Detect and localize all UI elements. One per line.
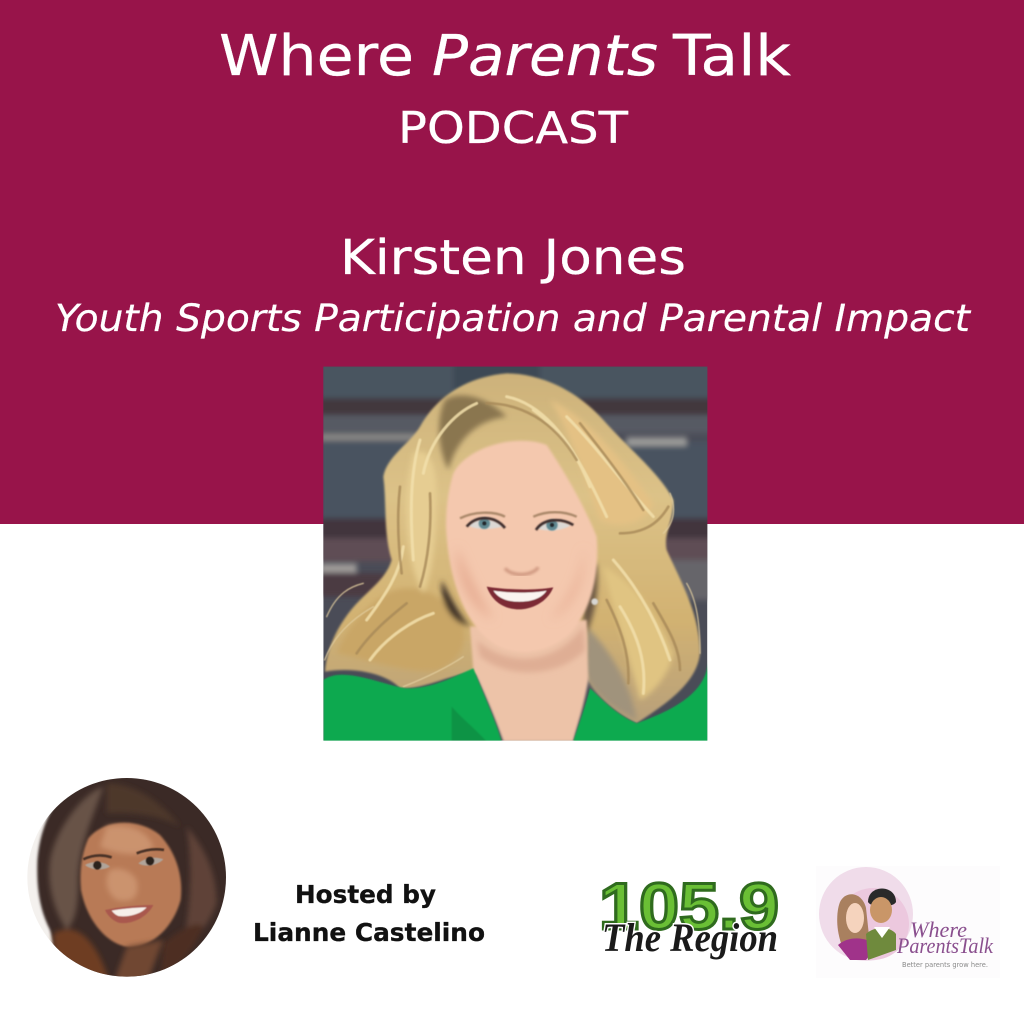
neck and chest [470, 620, 588, 742]
logo: 105.9 The Region: The Region [602, 915, 778, 960]
title: Where Parents Talk: Where [219, 24, 414, 89]
eyebrows [460, 512, 577, 518]
logo: Where Parents Talk [816, 866, 1000, 978]
mouth [487, 587, 553, 609]
host face [80, 823, 181, 947]
green blouse [323, 660, 708, 742]
episode topic: Youth Sports Participation and Parental Impact [55, 297, 972, 340]
logo: Where Parents Talk: Where [910, 917, 967, 942]
guest name: Kirsten Jones [340, 230, 686, 286]
earring [591, 598, 598, 605]
logo father figure [866, 888, 896, 960]
title: Where Parents Talk: Parents [432, 24, 658, 89]
host smile [105, 905, 153, 923]
host credit: Lianne Castelino [253, 918, 485, 947]
title: Where Parents Talk: Talk [672, 24, 792, 89]
guest photo: Kirsten Jones [320, 363, 713, 742]
host photo: Lianne Castelino [28, 778, 226, 977]
logo: 105.9 The Region: 105.9 [599, 869, 779, 943]
hair strands [325, 397, 700, 693]
nose shadow [505, 567, 538, 574]
host eyes [83, 849, 164, 870]
logo: Where Parents Talk: Better parents grow here. [902, 961, 988, 969]
hair [325, 373, 700, 723]
host credit [253, 880, 485, 947]
maroon header band [0, 0, 1024, 524]
subtitle: podcast: PODCAST [398, 103, 628, 154]
host credit: Hosted by [295, 880, 436, 909]
logo mother figure [837, 894, 877, 960]
face [446, 441, 597, 652]
logo: Where Parents Talk: ParentsTalk [896, 933, 994, 958]
eyes [467, 518, 573, 531]
title: Where Parents Talk [219, 24, 792, 89]
